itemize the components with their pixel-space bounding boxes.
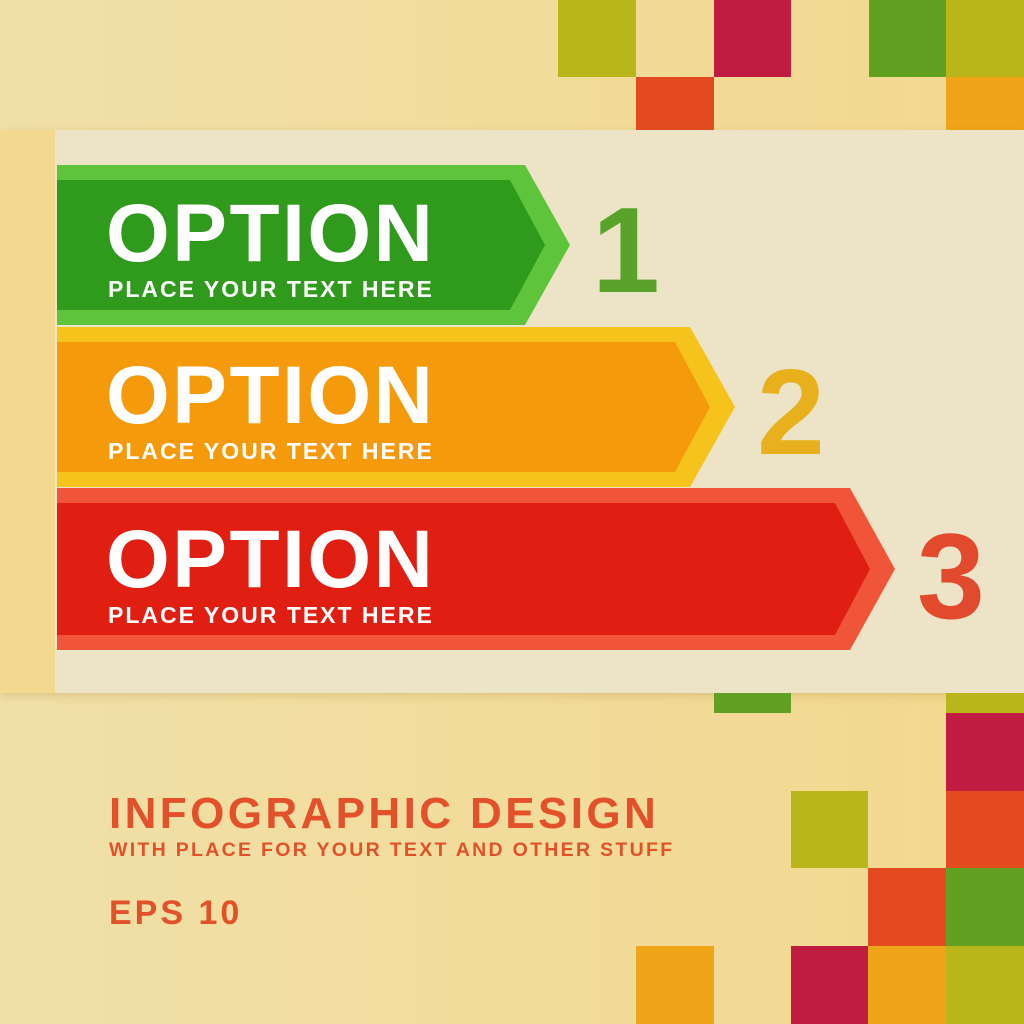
footer title: WITH PLACE FOR YOUR TEXT AND OTHER STUFF bbox=[109, 839, 674, 861]
top squares bbox=[558, 0, 1024, 130]
ribbons bbox=[57, 165, 895, 650]
eps label: EPS 10 bbox=[109, 894, 242, 932]
footer title bbox=[109, 789, 674, 861]
number 1: 1 bbox=[592, 182, 660, 318]
option 2 text: OPTION bbox=[106, 350, 435, 441]
option 3 text: OPTION bbox=[106, 514, 435, 605]
number 2: 2 bbox=[757, 344, 825, 480]
number 3: 3 bbox=[917, 508, 985, 644]
bottom squares bbox=[636, 693, 1024, 1024]
ribbon 3 bbox=[57, 488, 895, 650]
option 1 text: PLACE YOUR TEXT HERE bbox=[108, 276, 434, 302]
option 2 text: PLACE YOUR TEXT HERE bbox=[108, 438, 434, 464]
option 3 text: PLACE YOUR TEXT HERE bbox=[108, 602, 434, 628]
option 1 text: OPTION bbox=[106, 188, 435, 279]
middle band bbox=[0, 130, 1024, 693]
footer title: INFOGRAPHIC DESIGN bbox=[109, 789, 659, 838]
ribbon 1 bbox=[57, 165, 570, 325]
ribbon 2 bbox=[57, 327, 735, 487]
